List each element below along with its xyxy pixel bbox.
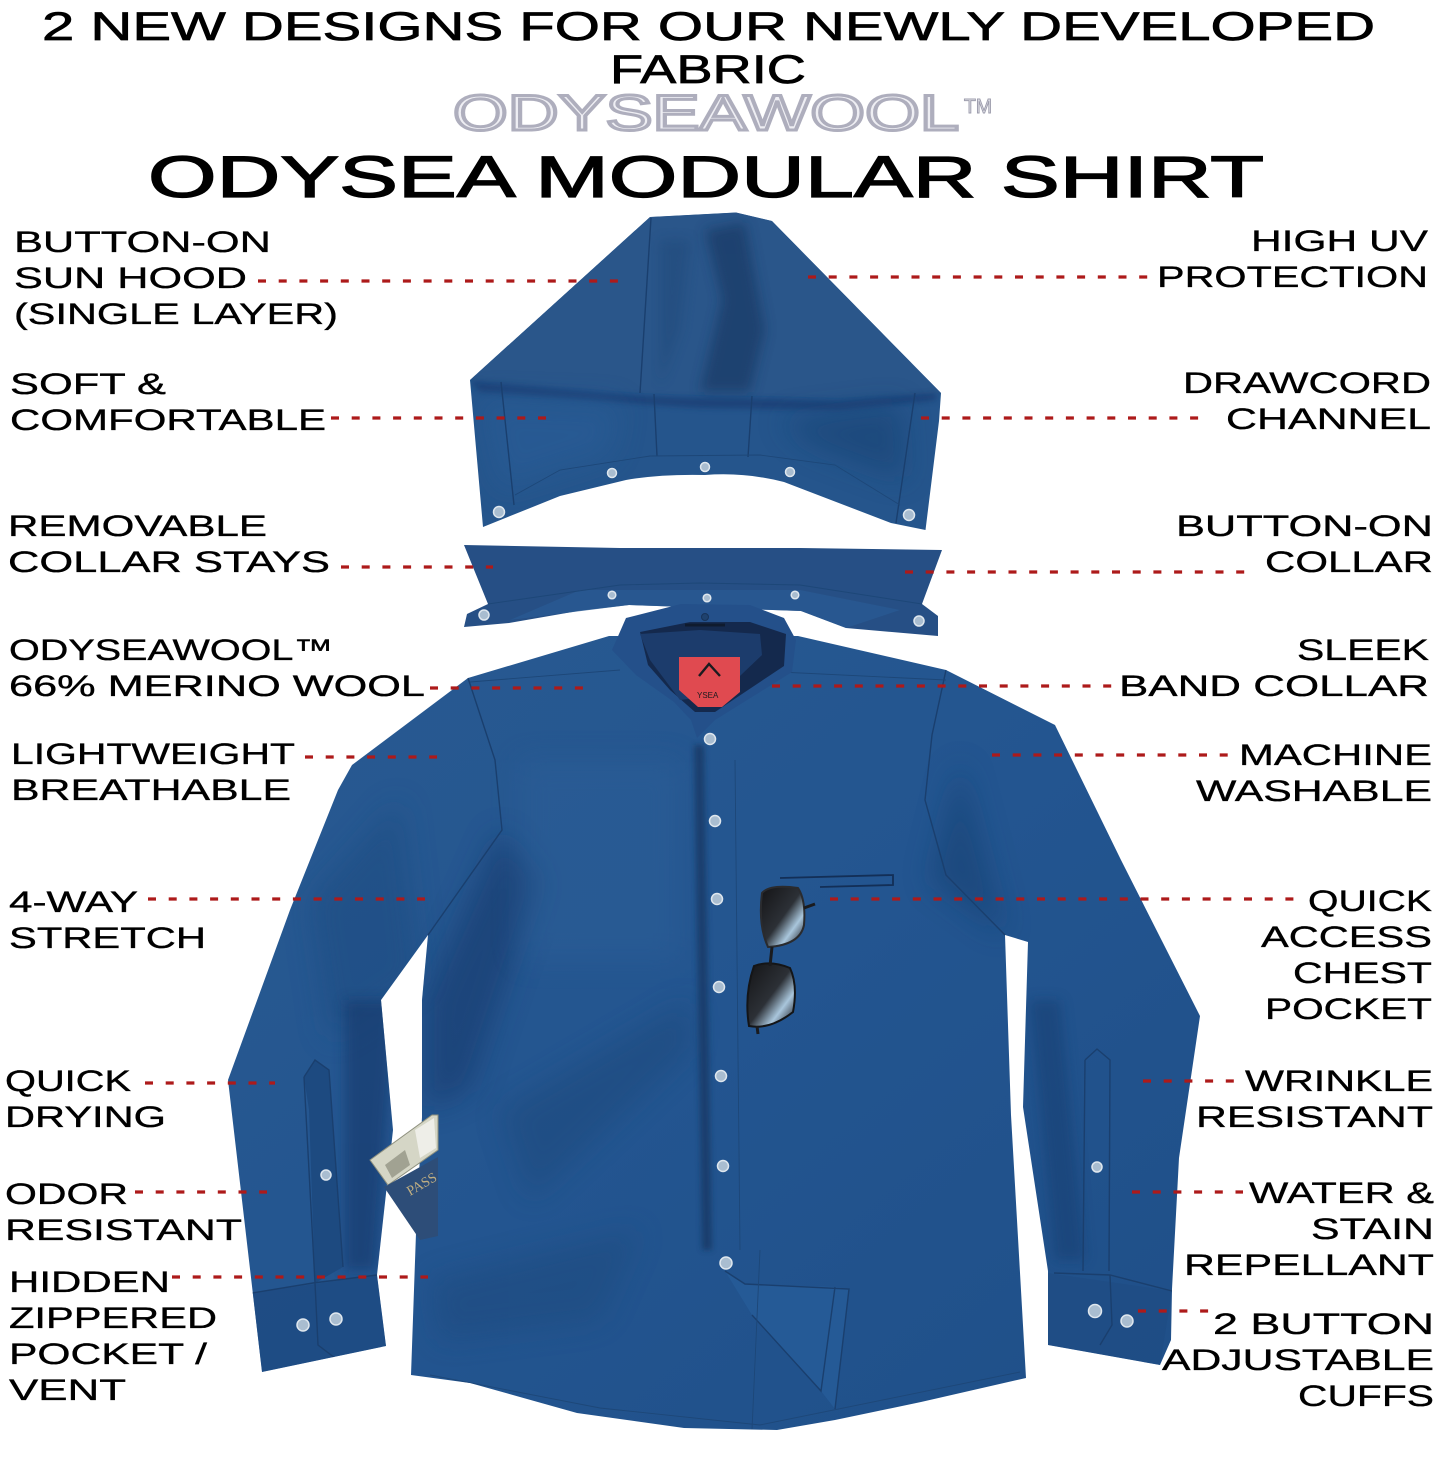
label: sleek band collar [1119,634,1429,703]
label: button-on sun hood: SUN HOOD [14,262,247,295]
label: soft and comfortable: COMFORTABLE [10,404,326,437]
logo: OdyseaWool wordmark: ODYSEAWOOL [453,85,959,141]
shirt illustration [228,604,1200,1430]
title: Odysea Modular Shirt: ODYSEA MODULAR SHIRT [148,145,1264,210]
label: button-on collar: BUTTON-ON [1176,510,1433,543]
label: adjustable cuffs [1162,1308,1434,1413]
label: sleek band collar: SLEEK [1297,634,1429,667]
label: button-on collar [1176,510,1433,579]
label: 4-way stretch [9,886,206,955]
label: odor resistant: RESISTANT [5,1214,242,1247]
callout lines: left [135,281,620,1277]
label: quick access chest pocket: POCKET [1265,993,1432,1026]
cash and passport in hidden pocket: PASS [404,1170,440,1199]
label: sleek band collar: BAND COLLAR [1119,670,1429,703]
label: machine washable: MACHINE [1239,739,1432,772]
label: odor resistant [5,1178,242,1247]
label: quick drying [5,1065,166,1134]
label: odyseawool merino: ODYSEAWOOL™ [9,634,333,667]
label: high uv protection: PROTECTION [1157,261,1428,294]
label: hidden zippered pocket: HIDDEN [9,1266,170,1299]
label: odyseawool merino [9,634,425,703]
label: quick access chest pocket: ACCESS [1261,921,1432,954]
label: water and stain repellant: STAIN [1311,1213,1434,1246]
label: button-on sun hood: (SINGLE LAYER) [14,298,338,331]
label: quick drying: DRYING [5,1101,166,1134]
callout lines: right [772,277,1300,1311]
sunglasses [747,887,815,1034]
neck label [679,657,740,707]
label: 4-way stretch: STRETCH [9,922,206,955]
label: machine washable [1196,739,1432,808]
shirt buttons [297,734,1133,1331]
label: adjustable cuffs: 2 BUTTON [1213,1308,1434,1341]
label: hidden zippered pocket: ZIPPERED [9,1302,217,1335]
label: soft and comfortable [10,368,326,437]
label: drawcord channel [1183,367,1431,436]
label: adjustable cuffs: CUFFS [1298,1380,1434,1413]
label: quick access chest pocket: QUICK [1308,885,1432,918]
label: lightweight breathable [11,738,295,807]
label: 4-way stretch: 4-WAY [9,886,138,919]
logo: OdyseaWool wordmark: TM [964,96,992,118]
folded hem corner [725,1271,849,1409]
label: wrinkle resistant [1196,1065,1433,1134]
label: button-on collar: COLLAR [1265,546,1433,579]
label: quick drying: QUICK [5,1065,131,1098]
label: water and stain repellant [1184,1177,1434,1282]
label: soft and comfortable: SOFT & [10,368,166,401]
label: wrinkle resistant: RESISTANT [1196,1101,1433,1134]
label: hidden zippered pocket [9,1266,217,1407]
label: drawcord channel: CHANNEL [1226,403,1431,436]
label: hidden zippered pocket: VENT [9,1374,126,1407]
label: lightweight breathable: BREATHABLE [11,774,291,807]
title: headline: 2 NEW DESIGNS FOR OUR NEWLY DEVELOPED [42,5,1375,49]
label: odor resistant: ODOR [5,1178,128,1211]
title: headline [42,5,1375,92]
label: hidden zippered pocket: POCKET / [9,1338,208,1371]
label: removable collar stays: COLLAR STAYS [8,546,330,579]
label: high uv protection [1157,225,1428,294]
right sleeve placket [1083,1049,1110,1271]
left sleeve placket [304,1060,343,1283]
button-on collar illustration [464,545,942,636]
label: wrinkle resistant: WRINKLE [1245,1065,1433,1098]
label: quick access chest pocket: CHEST [1293,957,1432,990]
label: quick access chest pocket [1261,885,1432,1026]
label: removable collar stays: REMOVABLE [8,510,267,543]
label: water and stain repellant: WATER & [1249,1177,1434,1210]
label: water and stain repellant: REPELLANT [1184,1249,1434,1282]
label: odyseawool merino: 66% MERINO WOOL [9,670,425,703]
label: button-on sun hood: BUTTON-ON [14,226,271,259]
band collar [612,604,796,738]
label: high uv protection: HIGH UV [1251,225,1428,258]
label: removable collar stays [8,510,330,579]
seams [428,670,1005,935]
label: lightweight breathable: LIGHTWEIGHT [11,738,295,771]
label: machine washable: WASHABLE [1196,775,1432,808]
neck label: YSEA [697,691,719,700]
hood illustration [470,212,941,530]
chest pocket [780,875,893,887]
label: button-on sun hood [14,226,338,331]
title: headline: FABRIC [610,48,806,92]
logo: OdyseaWool wordmark [453,85,992,141]
cash and passport in hidden pocket [370,1115,440,1240]
label: drawcord channel: DRAWCORD [1183,367,1431,400]
label: adjustable cuffs: ADJUSTABLE [1162,1344,1434,1377]
